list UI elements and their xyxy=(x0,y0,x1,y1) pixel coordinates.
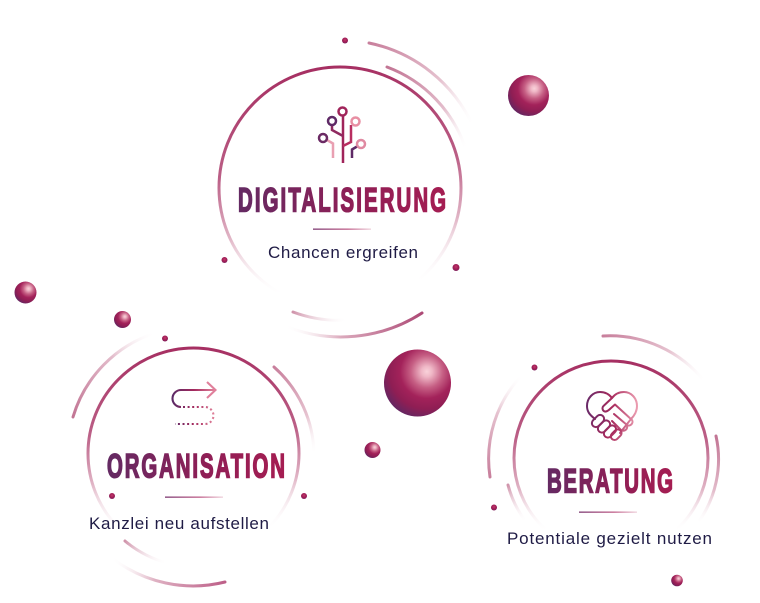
heading: ORGANISATION xyxy=(107,447,285,485)
subtitle: Chancen ergreifen xyxy=(268,243,418,262)
outer arcs xyxy=(285,43,473,337)
small decorative dots xyxy=(109,38,538,510)
subtitle: Kanzlei neu aufstellen xyxy=(89,514,269,533)
panel: Beratung xyxy=(489,336,719,555)
icon: heart handshake xyxy=(587,392,637,442)
main ring xyxy=(88,348,299,559)
outer arcs xyxy=(489,336,719,524)
large decorative spheres xyxy=(14,75,683,586)
divider xyxy=(313,228,371,230)
icon: winding arrow xyxy=(172,382,216,424)
main ring xyxy=(514,361,708,555)
heading: BERATUNG xyxy=(547,462,673,500)
panel: Organisation xyxy=(73,333,314,586)
outer arcs xyxy=(73,333,314,586)
divider xyxy=(165,496,223,498)
subtitle: Potentiale gezielt nutzen xyxy=(507,529,712,548)
main ring xyxy=(219,67,461,309)
divider xyxy=(579,512,637,513)
panel: Digitalisierung xyxy=(219,43,473,337)
heading: DIGITALISIERUNG xyxy=(238,181,446,219)
icon: circuit tree xyxy=(319,108,365,163)
